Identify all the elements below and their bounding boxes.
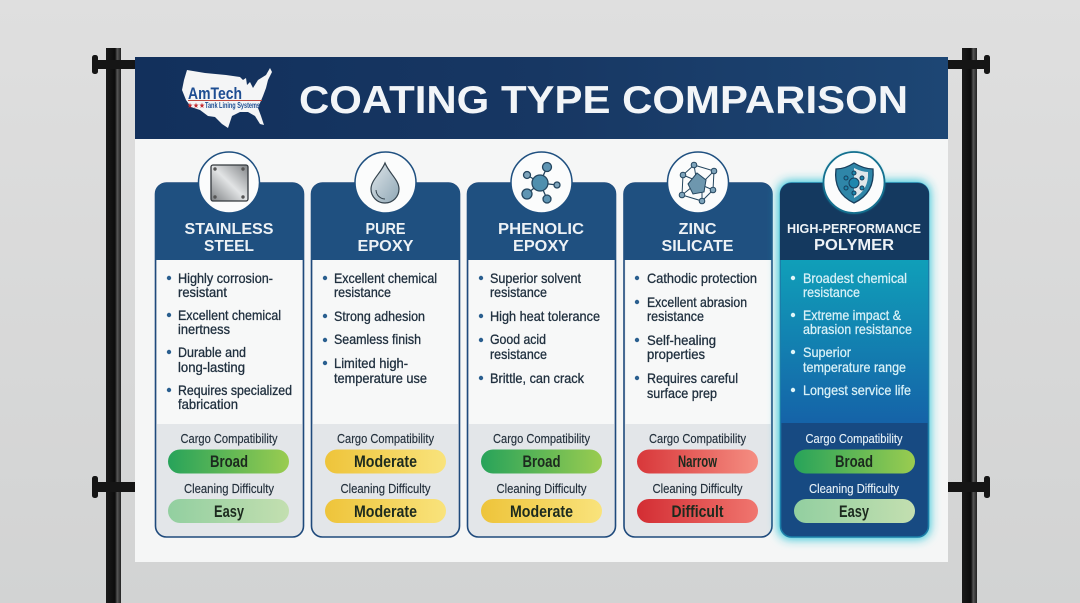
heading bbox=[358, 221, 414, 255]
feature list bbox=[167, 270, 292, 412]
ratings: Cargo Compatibility bbox=[806, 431, 903, 446]
feature list: Superior solvent bbox=[490, 270, 581, 286]
feature list: Superior bbox=[803, 344, 851, 360]
ratings: Broad bbox=[522, 453, 560, 471]
feature list: Strong adhesion bbox=[334, 308, 425, 324]
heading: EPOXY bbox=[358, 238, 414, 255]
icon: crystal lattice bbox=[668, 152, 728, 213]
ratings: Moderate bbox=[354, 453, 417, 471]
feature list bbox=[323, 270, 437, 386]
logo tagline: Tank Lining Systems bbox=[205, 100, 260, 110]
ratings: Broad bbox=[210, 453, 248, 471]
feature list: resistance bbox=[803, 284, 860, 300]
heading: PURE bbox=[366, 221, 406, 238]
banner body bbox=[135, 139, 948, 562]
ratings: Cleaning Difficulty bbox=[496, 481, 587, 496]
ratings: Moderate bbox=[510, 503, 573, 521]
feature list: Brittle, can crack bbox=[490, 370, 585, 386]
ratings: Difficult bbox=[672, 503, 724, 521]
feature list: inertness bbox=[178, 321, 230, 337]
heading: PHENOLIC bbox=[498, 221, 584, 238]
feature list: Limited high- bbox=[334, 355, 408, 371]
panel: zinc silicate bbox=[624, 152, 772, 537]
feature list: Requires specialized bbox=[178, 382, 292, 398]
feature list: resistance bbox=[334, 284, 391, 300]
panel: pure epoxy bbox=[311, 152, 460, 537]
heading: STEEL bbox=[204, 238, 254, 255]
feature list bbox=[635, 270, 757, 401]
ratings: Broad bbox=[835, 453, 873, 471]
heading bbox=[184, 221, 274, 255]
feature list: temperature range bbox=[803, 359, 906, 375]
feature list bbox=[479, 270, 600, 386]
feature list bbox=[791, 270, 912, 398]
feature list: Excellent chemical bbox=[178, 307, 281, 323]
ratings: Cargo Compatibility bbox=[337, 431, 434, 446]
ratings: Moderate bbox=[354, 503, 417, 521]
ratings: Cargo Compatibility bbox=[493, 431, 590, 446]
feature list: Longest service life bbox=[803, 382, 911, 398]
ratings bbox=[325, 431, 446, 523]
ratings: Cargo Compatibility bbox=[649, 431, 746, 446]
heading: EPOXY bbox=[513, 238, 570, 255]
ratings bbox=[794, 431, 915, 523]
feature list: properties bbox=[647, 346, 705, 362]
feature list: long-lasting bbox=[178, 359, 245, 375]
feature list: surface prep bbox=[647, 385, 717, 401]
ratings: Cleaning Difficulty bbox=[184, 481, 274, 496]
ratings bbox=[637, 431, 758, 523]
ratings bbox=[168, 431, 289, 523]
heading: ZINC bbox=[678, 221, 716, 238]
right banner stand bbox=[948, 48, 990, 603]
left banner stand bbox=[92, 48, 135, 603]
logo bbox=[182, 68, 272, 128]
feature list: Seamless finish bbox=[334, 331, 421, 347]
icon: drop bbox=[355, 152, 416, 213]
feature list: Durable and bbox=[178, 344, 246, 360]
feature list: resistance bbox=[490, 346, 547, 362]
feature list: resistant bbox=[178, 284, 227, 300]
feature list: Broadest chemical bbox=[803, 270, 907, 286]
panel: stainless steel bbox=[155, 152, 304, 537]
feature list: High heat tolerance bbox=[490, 308, 600, 324]
panel: phenolic epoxy bbox=[467, 152, 616, 537]
heading: STAINLESS bbox=[184, 221, 274, 238]
feature list: Excellent chemical bbox=[334, 270, 437, 286]
heading: SILICATE bbox=[662, 238, 734, 255]
ratings: Easy bbox=[214, 503, 245, 521]
heading: POLYMER bbox=[814, 237, 894, 254]
heading: HIGH-PERFORMANCE bbox=[787, 222, 921, 236]
feature list: Requires careful bbox=[647, 370, 738, 386]
heading bbox=[498, 221, 584, 255]
ratings: Easy bbox=[839, 503, 870, 521]
ratings: Cleaning Difficulty bbox=[340, 481, 431, 496]
feature list: Excellent abrasion bbox=[647, 294, 747, 310]
feature list: fabrication bbox=[178, 396, 238, 412]
logo stars: ★★★ bbox=[187, 101, 205, 110]
heading bbox=[662, 221, 734, 255]
logo wordmark: AmTech bbox=[188, 84, 242, 103]
feature list: Good acid bbox=[490, 331, 546, 347]
ratings: Cleaning Difficulty bbox=[809, 481, 899, 496]
panel: high-performance polymer bbox=[778, 152, 930, 539]
feature list: Highly corrosion- bbox=[178, 270, 273, 286]
title: COATING TYPE COMPARISON bbox=[299, 79, 908, 122]
icon: steel plate bbox=[198, 152, 260, 213]
feature list: abrasion resistance bbox=[803, 321, 912, 337]
ratings bbox=[481, 431, 602, 523]
icon: USA map bbox=[182, 68, 272, 128]
feature list: Extreme impact & bbox=[803, 307, 902, 323]
feature list: resistance bbox=[490, 284, 547, 300]
feature list: Self-healing bbox=[647, 332, 716, 348]
feature list: temperature use bbox=[334, 370, 427, 386]
feature list: Cathodic protection bbox=[647, 270, 757, 286]
ratings: Cargo Compatibility bbox=[180, 431, 278, 446]
feature list: resistance bbox=[647, 308, 704, 324]
heading bbox=[787, 222, 921, 254]
ratings: Narrow bbox=[678, 453, 717, 471]
header band bbox=[135, 57, 948, 139]
icon: molecule bbox=[511, 152, 572, 213]
ratings: Cleaning Difficulty bbox=[652, 481, 743, 496]
icon: shield bbox=[823, 152, 885, 214]
logo rule bbox=[188, 100, 262, 101]
